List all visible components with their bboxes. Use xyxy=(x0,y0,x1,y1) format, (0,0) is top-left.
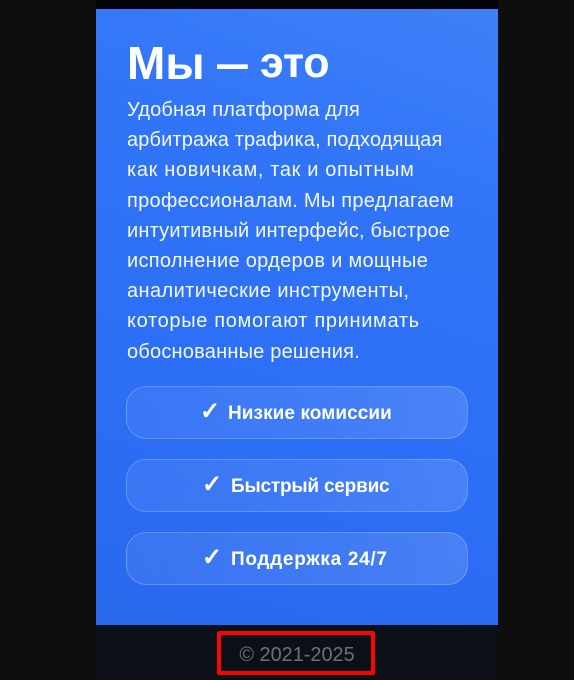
feature: support: Поддержка 24/7 xyxy=(231,549,388,570)
copyright text: © 2021-2025 xyxy=(239,644,355,666)
text block: description: Удобная платформа для xyxy=(127,99,360,121)
feature: low fees xyxy=(126,386,468,439)
feature: low fees: Низкие комиссии xyxy=(228,403,392,424)
title: Мы xyxy=(127,37,205,89)
feature: support xyxy=(126,532,468,585)
red highlight frame xyxy=(217,631,375,675)
text block: description: арбитража трафика, подходящая xyxy=(127,129,442,151)
text block: description: обоснованные решения. xyxy=(127,340,360,362)
text block: description: которые помогают принимать xyxy=(127,310,420,332)
top strip xyxy=(96,0,498,9)
feature: fast service xyxy=(126,459,468,512)
text block: description: исполнение ордеров и мощные xyxy=(127,250,428,272)
feature: support: ✓ xyxy=(202,543,222,571)
text block: description: аналитические инструменты, xyxy=(127,280,409,302)
feature: low fees: ✓ xyxy=(200,397,220,425)
title: — xyxy=(217,37,248,89)
text block: description xyxy=(127,99,454,362)
feature: fast service: Быстрый сервис xyxy=(231,476,389,497)
text block: description: интуитивный интерфейс, быстрое xyxy=(127,220,450,242)
title: это xyxy=(260,39,329,87)
text block: description: профессионалам. Мы предлагаем xyxy=(127,190,454,212)
panel: about xyxy=(96,9,498,625)
feature: fast service: ✓ xyxy=(202,470,222,498)
title xyxy=(127,37,329,89)
footer bar xyxy=(96,625,498,677)
text block: description: как новичкам, так и опытным xyxy=(127,159,414,181)
